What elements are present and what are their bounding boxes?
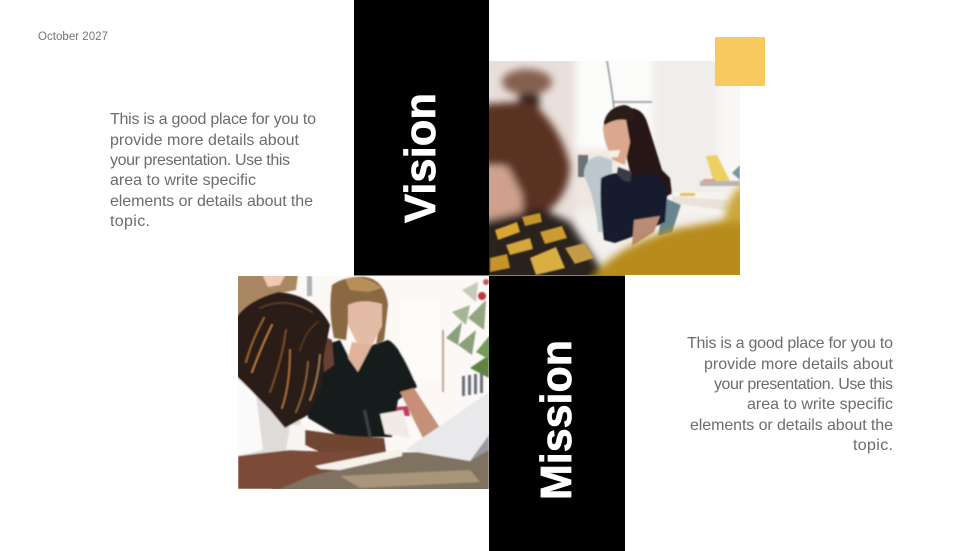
text block: vision description: topic. <box>110 213 150 230</box>
heading: Mission: Mission <box>532 340 581 500</box>
text block: mission description: elements or details about the <box>690 417 893 434</box>
text block: mission description: your presentation. Use this <box>714 376 893 393</box>
text block: vision description: This is a good place for you to <box>110 111 316 128</box>
photo: two colleagues working at laptop <box>236 274 490 492</box>
date label: October 2027 <box>38 31 108 43</box>
text block: vision description: elements or details about the <box>110 193 313 210</box>
text block: vision description: your presentation. Use this <box>110 152 290 169</box>
text block: mission description: This is a good place for you to <box>687 335 893 352</box>
plant <box>446 279 490 378</box>
text block: mission description: provide more details about <box>704 356 894 373</box>
text block: mission description <box>687 335 894 454</box>
panel: vision black bar <box>354 0 489 276</box>
text block: mission description: topic. <box>853 437 893 454</box>
panel: mission black bar <box>489 276 625 551</box>
text block: vision description <box>110 111 316 230</box>
curly hair highlights <box>246 303 320 412</box>
text block: mission description: area to write specific <box>747 396 893 413</box>
text block: vision description: provide more details about <box>110 132 300 149</box>
decorative accent: yellow square <box>715 37 765 86</box>
text block: vision description: area to write specific <box>110 172 256 189</box>
photo: woman smiling in meeting <box>489 61 740 275</box>
heading: Vision: Vision <box>396 93 445 223</box>
